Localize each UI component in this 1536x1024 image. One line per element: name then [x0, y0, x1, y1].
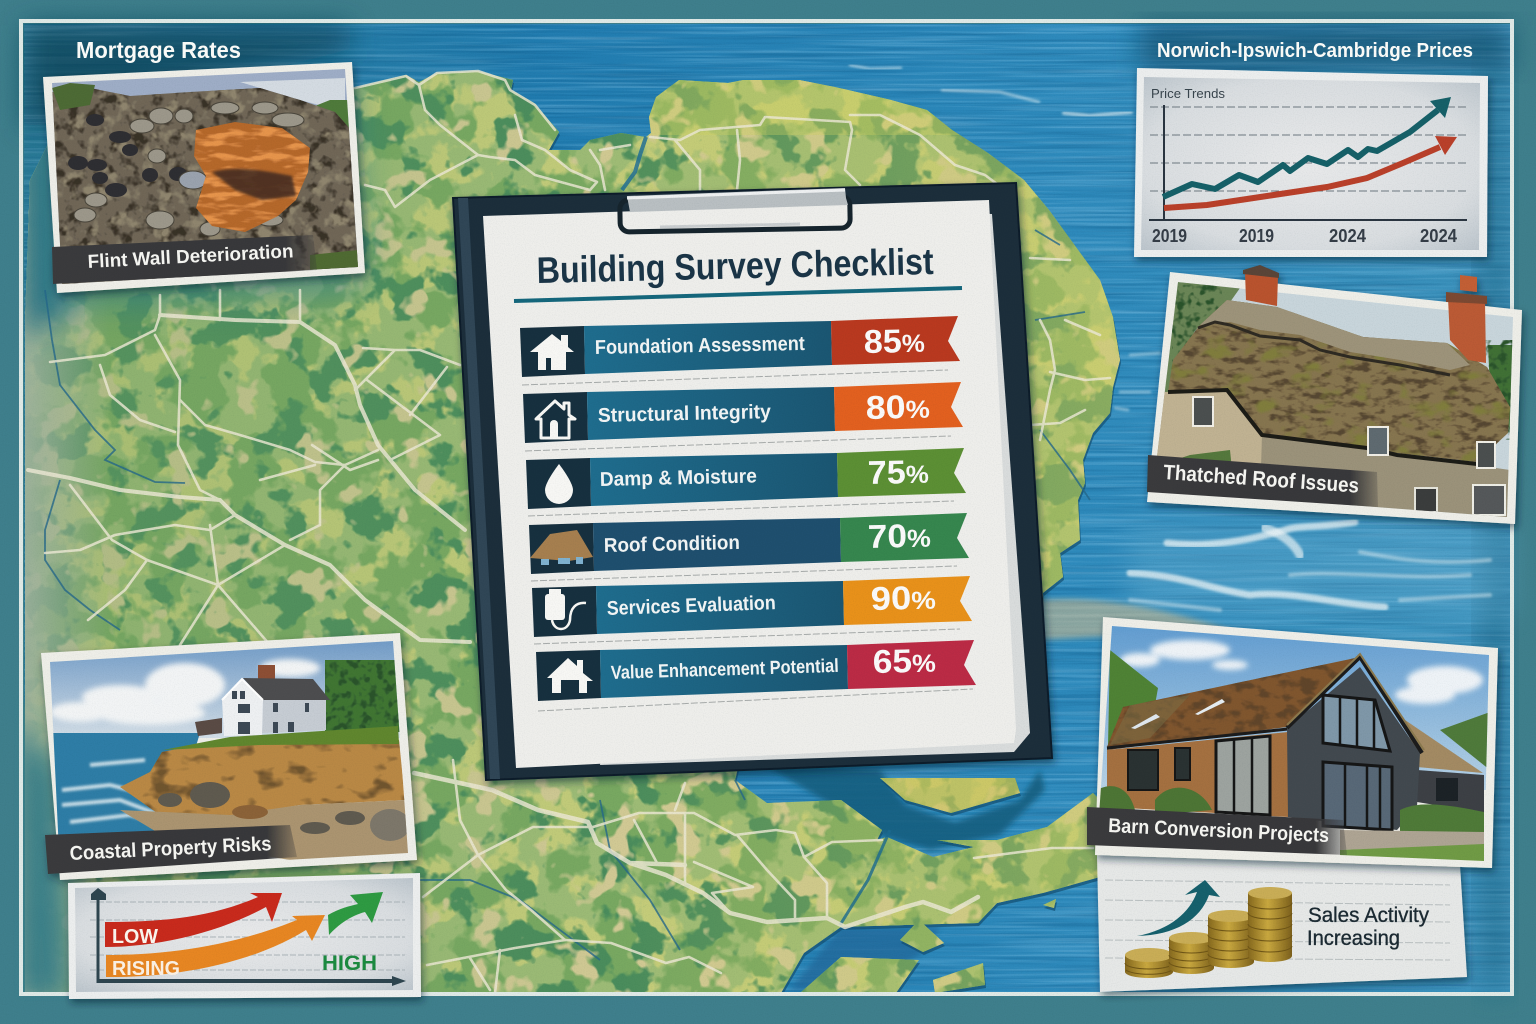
year labels: 2019	[1239, 226, 1274, 246]
card	[68, 873, 421, 999]
photo frame	[43, 62, 365, 293]
caption banner	[1087, 807, 1347, 855]
panel: barn conversion photo	[1087, 617, 1498, 868]
row: Structural Integrity: 80%	[865, 388, 930, 426]
ivy	[1182, 450, 1232, 462]
arrow: green	[328, 892, 383, 935]
plot background	[1141, 77, 1480, 250]
clip	[620, 188, 850, 232]
plot background	[75, 878, 413, 992]
row: Value Enhancement Potential: Value Enhancement Potential	[610, 656, 839, 684]
year labels: 2024	[1420, 226, 1457, 246]
title: Norwich-Ipswich-Cambridge Prices: Norwich-Ipswich-Cambridge Prices	[1157, 40, 1473, 62]
sandy shallows	[1040, 599, 1230, 640]
label RISING: RISING	[112, 958, 180, 980]
row: Damp & Moisture	[526, 448, 966, 516]
year labels: 2019	[1152, 226, 1187, 246]
photo: cliff-top house	[45, 638, 415, 860]
paper sheet	[483, 200, 1016, 768]
chart label: Price Trends	[1151, 86, 1225, 101]
row: Roof Condition	[529, 513, 969, 581]
coin stack 2	[1169, 932, 1214, 974]
road network	[28, 71, 1110, 993]
coin stack 3	[1208, 910, 1254, 968]
label LOW: LOW	[112, 926, 158, 948]
right wing	[1405, 720, 1483, 773]
panel: mortgage rate low-to-high graphic	[68, 873, 421, 999]
title: Mortgage Rates: Mortgage Rates	[76, 37, 241, 63]
row: Services Evaluation: 90%	[870, 579, 936, 617]
red trend line	[1164, 136, 1457, 208]
caption banner	[52, 235, 317, 284]
glazing	[1323, 695, 1390, 751]
main roof	[1105, 655, 1363, 752]
caption banner	[45, 825, 297, 874]
caption: Thatched Roof Issues	[1163, 461, 1360, 498]
foreground	[1097, 786, 1212, 815]
caption banner	[1147, 455, 1378, 507]
row: Services Evaluation: Services Evaluation	[606, 592, 776, 620]
house	[258, 665, 275, 680]
axes	[1149, 105, 1467, 220]
row: Value Enhancement Potential: 65%	[872, 642, 936, 680]
text: Sales Activity Increasing	[1307, 904, 1429, 950]
sea foam and waves	[850, 65, 1490, 610]
row: Services Evaluation	[532, 576, 972, 644]
land outline shadow	[511, 82, 1121, 992]
clad gable	[1287, 667, 1420, 830]
year labels: 2024	[1329, 226, 1366, 246]
panel: clipboard checklist	[453, 183, 1052, 780]
panel: price trends chart	[1134, 68, 1488, 257]
year labels	[1152, 226, 1457, 246]
board spine	[458, 198, 500, 779]
label HIGH: HIGH	[322, 952, 377, 975]
photo: barn	[1095, 620, 1495, 865]
text: Sales Activity Increasing: Sales Activity	[1308, 904, 1429, 927]
row: Foundation Assessment	[520, 316, 960, 385]
windows	[1193, 397, 1505, 515]
ruled lines	[1105, 880, 1450, 960]
arrow: teal rising	[1137, 880, 1220, 936]
photo frame	[41, 633, 417, 880]
row: Structural Integrity: Structural Integrity	[598, 401, 772, 427]
cliff	[118, 740, 408, 818]
panel: coastal property photo	[41, 633, 417, 880]
clipboard board	[453, 183, 1052, 780]
row: Roof Condition: 70%	[867, 517, 931, 555]
brick wall	[1107, 732, 1288, 817]
panel: sales activity card	[1097, 855, 1467, 992]
photo: flint wall	[52, 69, 358, 284]
card	[1134, 68, 1488, 257]
caption: Coastal Property Risks	[69, 833, 272, 865]
paper	[1097, 855, 1467, 992]
row: Foundation Assessment: Foundation Assessment	[595, 333, 805, 359]
arrow: red	[105, 893, 282, 947]
axes	[91, 888, 406, 986]
row: Damp & Moisture: Damp & Moisture	[600, 465, 757, 491]
landmass	[15, 20, 1130, 1000]
caption: Barn Conversion Projects	[1108, 815, 1330, 847]
row: Roof Condition: Roof Condition	[604, 532, 740, 557]
dashed guide lines	[90, 902, 405, 970]
row: Value Enhancement Potential	[536, 640, 976, 711]
gridlines	[1150, 107, 1467, 191]
row: Structural Integrity	[523, 382, 963, 451]
row: Damp & Moisture: 75%	[867, 453, 929, 491]
photo: thatched cottage	[1157, 282, 1513, 517]
rivers	[45, 137, 1090, 960]
text: Sales Activity Increasing: Increasing	[1307, 927, 1400, 950]
checklist title: Building Survey Checklist	[536, 241, 934, 291]
photo frame	[1095, 617, 1498, 868]
teal trend line	[1163, 97, 1451, 197]
coin stack 4	[1248, 887, 1292, 962]
lower paper sheet	[600, 205, 1030, 765]
panel: thatched roof photo	[1147, 265, 1525, 525]
chimneys	[1243, 265, 1487, 363]
caption: Flint Wall Deterioration	[87, 241, 294, 273]
orange exposed core	[194, 122, 310, 232]
row: Foundation Assessment: 85%	[863, 322, 925, 360]
arrow: orange	[106, 915, 325, 977]
panel: flint wall photo	[43, 62, 365, 295]
title underline	[514, 288, 962, 301]
coin stack 1	[1125, 948, 1173, 978]
photo frame	[1147, 272, 1522, 524]
